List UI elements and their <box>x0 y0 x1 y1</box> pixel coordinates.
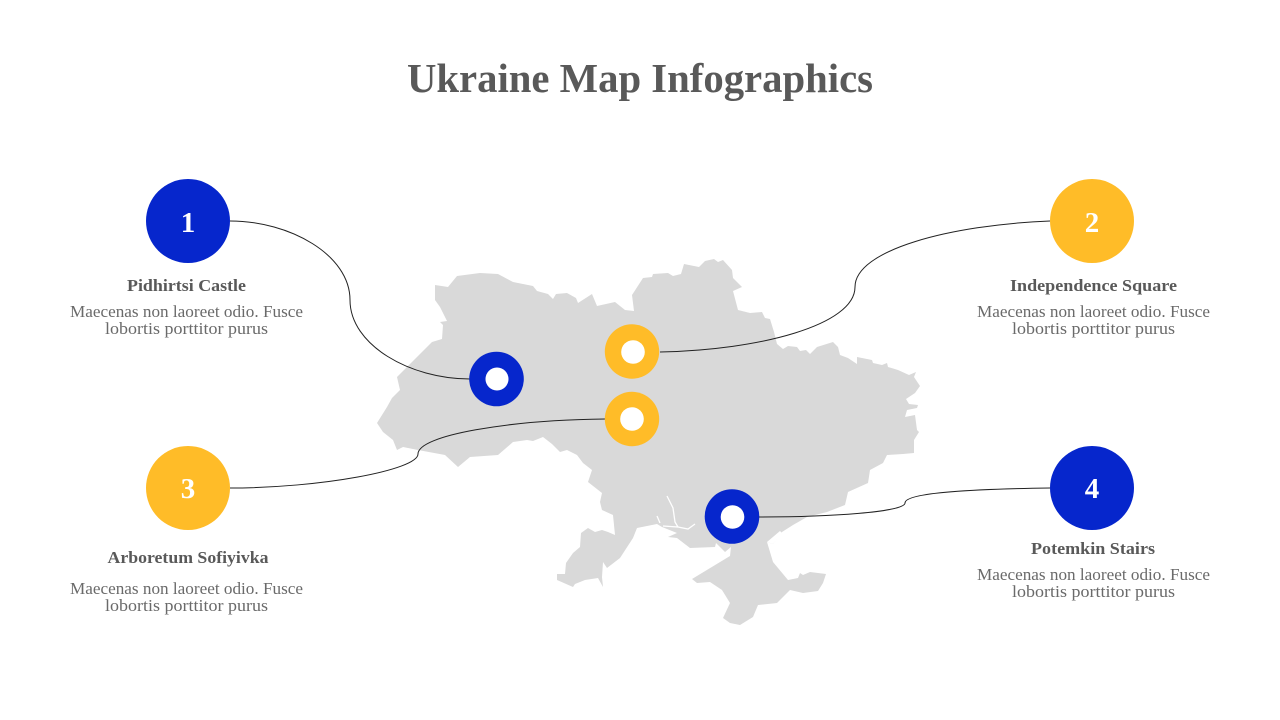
number badge 3 <box>146 446 230 530</box>
number badge 2: 2 <box>1085 207 1099 239</box>
title: Ukraine Map Infographics <box>407 55 873 101</box>
pin 1 <box>469 352 524 406</box>
item 1 body: lobortis porttitor purus <box>105 319 268 338</box>
item 4: Potemkin Stairs <box>977 446 1210 601</box>
number badge 4 <box>1050 446 1134 530</box>
item 2 body: lobortis porttitor purus <box>1012 319 1175 338</box>
item 2 heading: Independence Square <box>1010 276 1177 295</box>
connector 1 <box>230 221 470 379</box>
item 3: Arboretum Sofiyivka <box>70 446 303 615</box>
item 2 body <box>977 302 1210 338</box>
pin 3 <box>605 392 659 446</box>
item 2 body: Maecenas non laoreet odio. Fusce <box>977 302 1210 321</box>
connector 2 <box>660 221 1050 352</box>
number badge 2 <box>1050 179 1134 263</box>
number badge 1: 1 <box>181 207 195 239</box>
item 4 heading: Potemkin Stairs <box>1031 539 1155 558</box>
item 3 body: Maecenas non laoreet odio. Fusce <box>70 579 303 598</box>
item 3 heading: Arboretum Sofiyivka <box>108 548 269 567</box>
item 3 body: lobortis porttitor purus <box>105 596 268 615</box>
pin 2 <box>605 324 659 379</box>
connector 4 <box>759 488 1050 517</box>
item 1: Pidhirtsi Castle <box>70 179 303 338</box>
map of Ukraine <box>377 259 920 625</box>
item 1 body: Maecenas non laoreet odio. Fusce <box>70 302 303 321</box>
item 3 body <box>70 579 303 615</box>
number badge 4: 4 <box>1085 473 1099 505</box>
item 4 body: lobortis porttitor purus <box>1012 582 1175 601</box>
number badge 1 <box>146 179 230 263</box>
pin 4 <box>705 489 759 544</box>
item 1 heading: Pidhirtsi Castle <box>127 276 246 295</box>
item 4 body <box>977 565 1210 601</box>
number badge 3: 3 <box>181 473 195 505</box>
connector 3 <box>230 419 605 488</box>
item 2: Independence Square <box>977 179 1210 338</box>
item 1 body <box>70 302 303 338</box>
item 4 body: Maecenas non laoreet odio. Fusce <box>977 565 1210 584</box>
